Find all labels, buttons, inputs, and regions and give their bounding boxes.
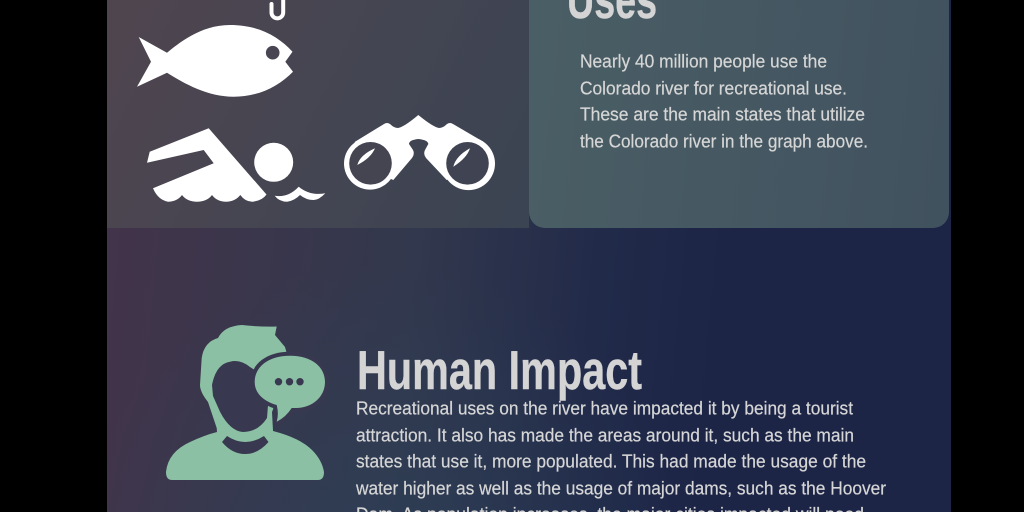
heading: human impact: Human Impact — [357, 339, 642, 401]
text: uses description: Colorado river for recreational use. — [580, 79, 847, 99]
speech bubble — [255, 356, 325, 422]
face — [212, 361, 270, 432]
icon: fish hook — [272, 0, 283, 18]
text: human impact description: Recreational uses on the river have impacted it by being a tourist — [356, 399, 853, 419]
icon: fish — [137, 25, 293, 97]
text: uses description: the Colorado river in the graph above. — [580, 132, 868, 152]
text: human impact description — [355, 399, 886, 512]
text: human impact description: water higher as well as the usage of major dams, such as the Hoover — [355, 479, 886, 499]
collar — [222, 436, 268, 454]
panel: uses — [529, 0, 949, 228]
text: human impact description: attraction. It also has made the areas around it, such as the main — [356, 426, 854, 446]
section: human impact — [166, 325, 886, 512]
text: uses description: Nearly 40 million people use the — [580, 52, 827, 72]
text: uses description — [580, 52, 868, 152]
icon: person with speech bubble — [166, 325, 325, 480]
text: uses description: These are the main states that utilize — [580, 105, 865, 125]
icon: swimmer — [147, 128, 325, 202]
panel: recreation icons — [107, 0, 529, 228]
icon: binoculars — [344, 115, 495, 190]
text: human impact description: states that use it, more populated. This had made the usage of the — [356, 452, 866, 472]
